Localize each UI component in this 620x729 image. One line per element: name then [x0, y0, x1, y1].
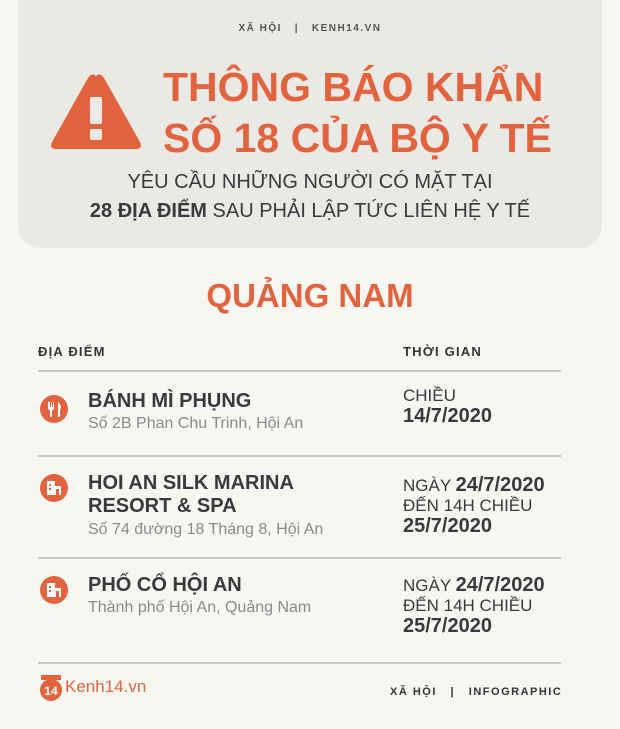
row 2: NGÀY 24/7/2020 — [403, 474, 545, 496]
column headers: THỜI GIAN — [403, 344, 482, 359]
subtitle: YÊU CẦU NHỮNG NGƯỜI CÓ MẶT TẠI — [127, 171, 493, 193]
row 3: 25/7/2020 — [403, 615, 492, 637]
row 1: BÁNH MÌ PHỤNG — [88, 390, 251, 412]
column headers: ĐỊA ĐIỂM — [38, 344, 106, 359]
row 1 — [40, 386, 492, 432]
title — [163, 64, 552, 161]
title: THÔNG BÁO KHẨN — [163, 64, 543, 110]
row 3: NGÀY 24/7/2020 — [403, 574, 545, 596]
row 3 — [40, 572, 545, 637]
subtitle: 28 ĐỊA ĐIỂM SAU PHẢI LẬP TỨC LIÊN HỆ Y TẾ — [90, 200, 530, 222]
footer tag: XÃ HỘI | INFOGRAPHIC — [390, 686, 562, 698]
subtitle — [90, 170, 530, 222]
text: 14 — [44, 684, 58, 698]
row 3: ĐẾN 14H CHIỀU — [403, 596, 532, 615]
row 2: HOI AN SILK MARINA — [88, 472, 294, 494]
footer logo — [40, 675, 146, 701]
title: SỐ 18 CỦA BỘ Y TẾ — [163, 115, 552, 161]
icon: building — [40, 576, 68, 604]
row 1: Số 2B Phan Chu Trinh, Hội An — [88, 415, 303, 432]
header panel — [18, 0, 602, 248]
row 1: 14/7/2020 — [403, 405, 492, 427]
row 3: PHỐ CỔ HỘI AN — [88, 574, 242, 596]
row 1: CHIỀU — [403, 386, 456, 405]
row 2: RESORT & SPA — [88, 495, 237, 517]
row 2: ĐẾN 14H CHIỀU — [403, 496, 532, 515]
heading: Quang Nam: QUẢNG NAM — [206, 277, 414, 314]
icon: warning triangle — [51, 74, 141, 149]
row 2: 25/7/2020 — [403, 515, 492, 537]
row 3: Thành phố Hội An, Quảng Nam — [88, 599, 311, 616]
top tag line: XÃ HỘI | KENH14.VN — [238, 23, 382, 34]
row 2: Số 74 đường 18 Tháng 8, Hội An — [88, 521, 323, 538]
icon: building — [40, 474, 68, 502]
row 2 — [40, 472, 545, 538]
icon: fork knife — [40, 395, 68, 423]
text: Kenh14.vn — [65, 677, 146, 696]
column headers — [38, 344, 482, 359]
